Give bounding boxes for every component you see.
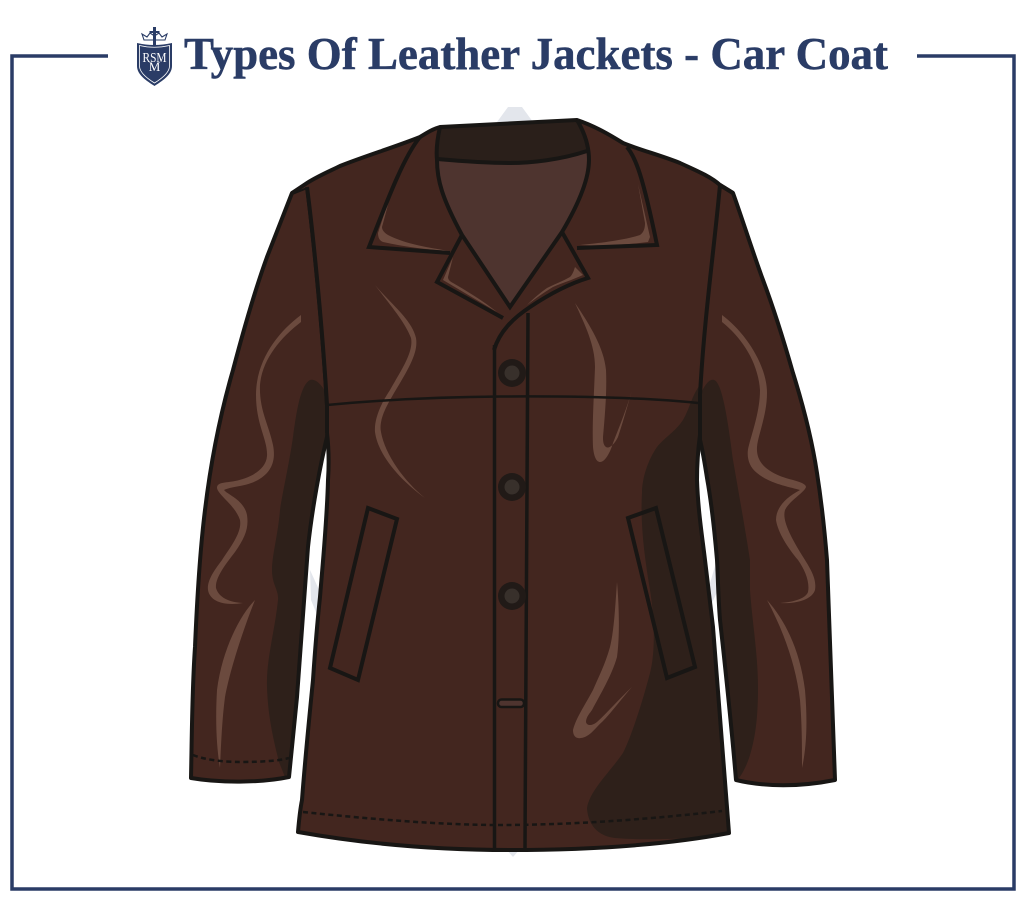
left sleeve highlight lower [216,600,255,768]
left pocket [330,508,397,680]
buttonhole loop [498,700,524,707]
button 3 [498,582,526,610]
placket lines [494,313,528,848]
left sleeve highlight upper [208,315,301,604]
logo crest: M [149,59,161,74]
jacket illustration [191,120,835,850]
logo crest [137,27,172,86]
body highlight left [375,285,425,498]
collar band [437,120,587,163]
body shadow [587,385,740,839]
right sleeve shadow [702,380,758,778]
right sleeve [690,185,835,785]
hanger behind jacket [310,107,718,857]
hem stitching [303,811,722,825]
body outline [292,120,733,850]
left sleeve [191,187,340,782]
collar and lapels [369,120,657,350]
body highlight lower right [573,582,632,738]
neck lining [437,151,587,307]
coat body [292,120,740,850]
shoulder seams [307,185,720,440]
left sleeve shadow [267,380,326,776]
button 2 [498,473,526,501]
yoke seam [327,396,698,405]
body highlight upper right [575,303,632,462]
right pocket [628,508,695,678]
button 1 [498,359,526,387]
right sleeve highlight lower [767,600,806,768]
right sleeve highlight upper [722,315,815,603]
logo crest: RSM [142,51,167,66]
collar highlights [378,184,650,312]
title: Types Of Leather Jackets - Car Coat [184,29,888,79]
